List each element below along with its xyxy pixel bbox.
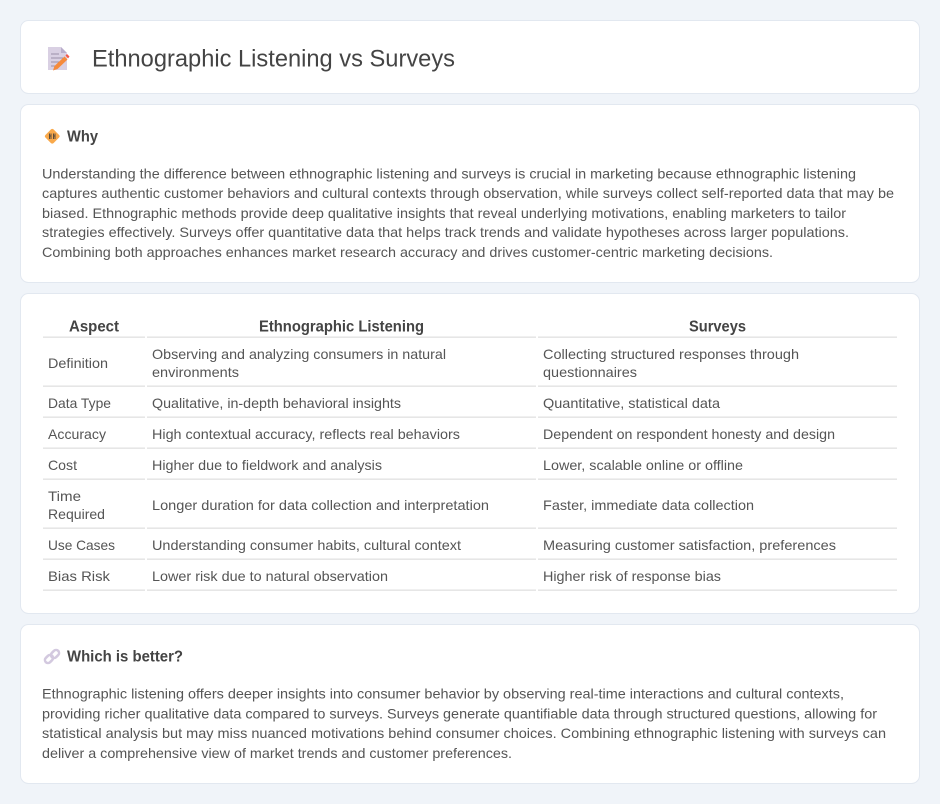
- row: bias risk: Bias Risk: [48, 568, 111, 584]
- text block: why paragraph: strategies effectively. Surveys offer quantitative data that helps track trends and validate hypotheses across larger populations.: [42, 224, 849, 240]
- row: data type: Qualitative, in-depth behavioral insights: [152, 395, 401, 411]
- row: time required: Time: [48, 488, 81, 504]
- text block: which is better paragraph: deliver a comprehensive view of market trends and customer preferences.: [42, 745, 512, 761]
- row: accuracy: Dependent on respondent honesty and design: [543, 426, 835, 442]
- text block: which is better paragraph: Ethnographic listening offers deeper insights into consumer behavior by observing real-time interactions and cultural contexts,: [42, 686, 844, 702]
- text block: why paragraph: Understanding the difference between ethnographic listening and surveys is crucial in marketing because ethnographic listening: [42, 166, 856, 182]
- text block: why paragraph: [42, 166, 894, 260]
- panel: why: [20, 104, 920, 282]
- row: use cases: Measuring customer satisfaction, preferences: [543, 537, 836, 553]
- title: Ethnographic Listening vs Surveys: [92, 46, 455, 72]
- row: data type: Data Type: [48, 395, 111, 411]
- row: bias risk: [48, 568, 721, 584]
- icon: memo with pencil: [48, 47, 70, 70]
- row: time required: Longer duration for data collection and interpretation: [152, 497, 489, 513]
- table header: [69, 318, 746, 336]
- icon: link: [44, 649, 60, 664]
- row: bias risk: Lower risk due to natural observation: [152, 568, 388, 584]
- row: definition: Definition: [48, 355, 108, 371]
- row: definition: Collecting structured responses through: [543, 346, 799, 362]
- row: time required: Required: [48, 506, 105, 522]
- row: definition: Observing and analyzing consumers in natural: [152, 346, 446, 362]
- row: accuracy: High contextual accuracy, reflects real behaviors: [152, 426, 460, 442]
- row: bias risk: Higher risk of response bias: [543, 568, 721, 584]
- panel: title header: [20, 20, 920, 94]
- row: data type: [48, 395, 720, 411]
- row: definition: [48, 346, 799, 380]
- heading: why: Why: [67, 128, 98, 146]
- panel: comparison table: [20, 294, 920, 614]
- row: cost: Cost: [48, 457, 77, 473]
- text block: why paragraph: Combining both approaches enhances market research accuracy and drives customer-centric marketing decisions.: [42, 244, 773, 260]
- text block: why paragraph: biased. Ethnographic methods provide deep qualitative insights that reveal underlying motivations, enabling marketers to tailor: [42, 205, 846, 221]
- row: definition: questionnaires: [543, 364, 637, 380]
- row: accuracy: [48, 426, 835, 442]
- row: use cases: Understanding consumer habits, cultural context: [152, 537, 461, 553]
- table header: Aspect: [69, 318, 120, 336]
- text block: which is better paragraph: [42, 686, 886, 761]
- row: time required: Faster, immediate data collection: [543, 497, 754, 513]
- row: cost: Higher due to fieldwork and analysis: [152, 457, 382, 473]
- heading: which is better: Which is better?: [67, 648, 183, 666]
- row: data type: Quantitative, statistical data: [543, 395, 720, 411]
- table header: Ethnographic Listening: [259, 318, 424, 336]
- row: cost: [48, 457, 743, 473]
- row: use cases: Use Cases: [48, 537, 115, 553]
- text block: which is better paragraph: statistical analysis but may miss nuanced motivations behind consumer choices. Combining ethnographic listening with surveys can: [42, 725, 886, 741]
- icon: orange diamond: [44, 128, 60, 144]
- row: definition: environments: [152, 364, 239, 380]
- table header: Surveys: [689, 318, 746, 336]
- text block: which is better paragraph: providing richer qualitative data compared to surveys. Surveys generate quantifiable data through structured questions, allowing for: [42, 706, 877, 722]
- row: time required: [48, 488, 754, 522]
- row: use cases: [48, 537, 836, 553]
- row: accuracy: Accuracy: [48, 426, 106, 442]
- text block: why paragraph: captures authentic customer behaviors and cultural contexts through observation, while surveys collect self-reported data that may be: [42, 185, 894, 201]
- row: cost: Lower, scalable online or offline: [543, 457, 743, 473]
- panel: which is better: [20, 624, 920, 784]
